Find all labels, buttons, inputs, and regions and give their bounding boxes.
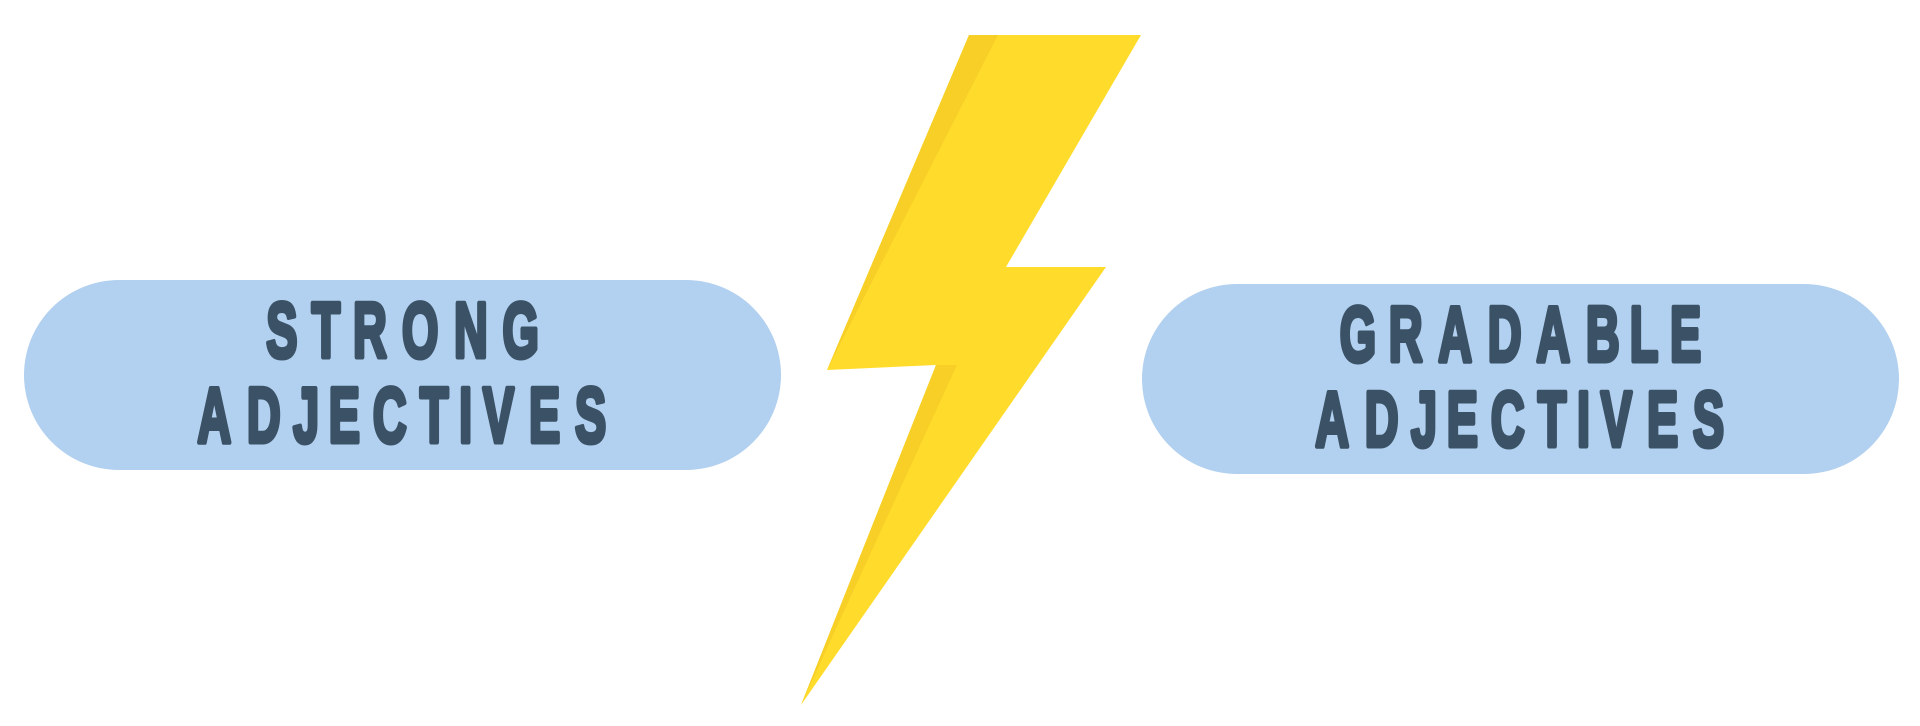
label: gradable adjectives: ADJECTIVES bbox=[1315, 376, 1724, 463]
label: strong adjectives: ADJECTIVES bbox=[197, 372, 606, 459]
label: strong adjectives: STRONG bbox=[266, 287, 539, 374]
panel: strong adjectives bbox=[24, 280, 781, 470]
panel: gradable adjectives bbox=[1142, 284, 1899, 474]
icon: lightning bolt bbox=[801, 35, 1141, 705]
label: gradable adjectives: GRADABLE bbox=[1340, 291, 1701, 378]
pill background: strong adjectives bbox=[24, 280, 781, 470]
label: strong adjectives bbox=[197, 287, 606, 459]
label: gradable adjectives bbox=[1315, 291, 1724, 463]
pill background: gradable adjectives bbox=[1142, 284, 1899, 474]
